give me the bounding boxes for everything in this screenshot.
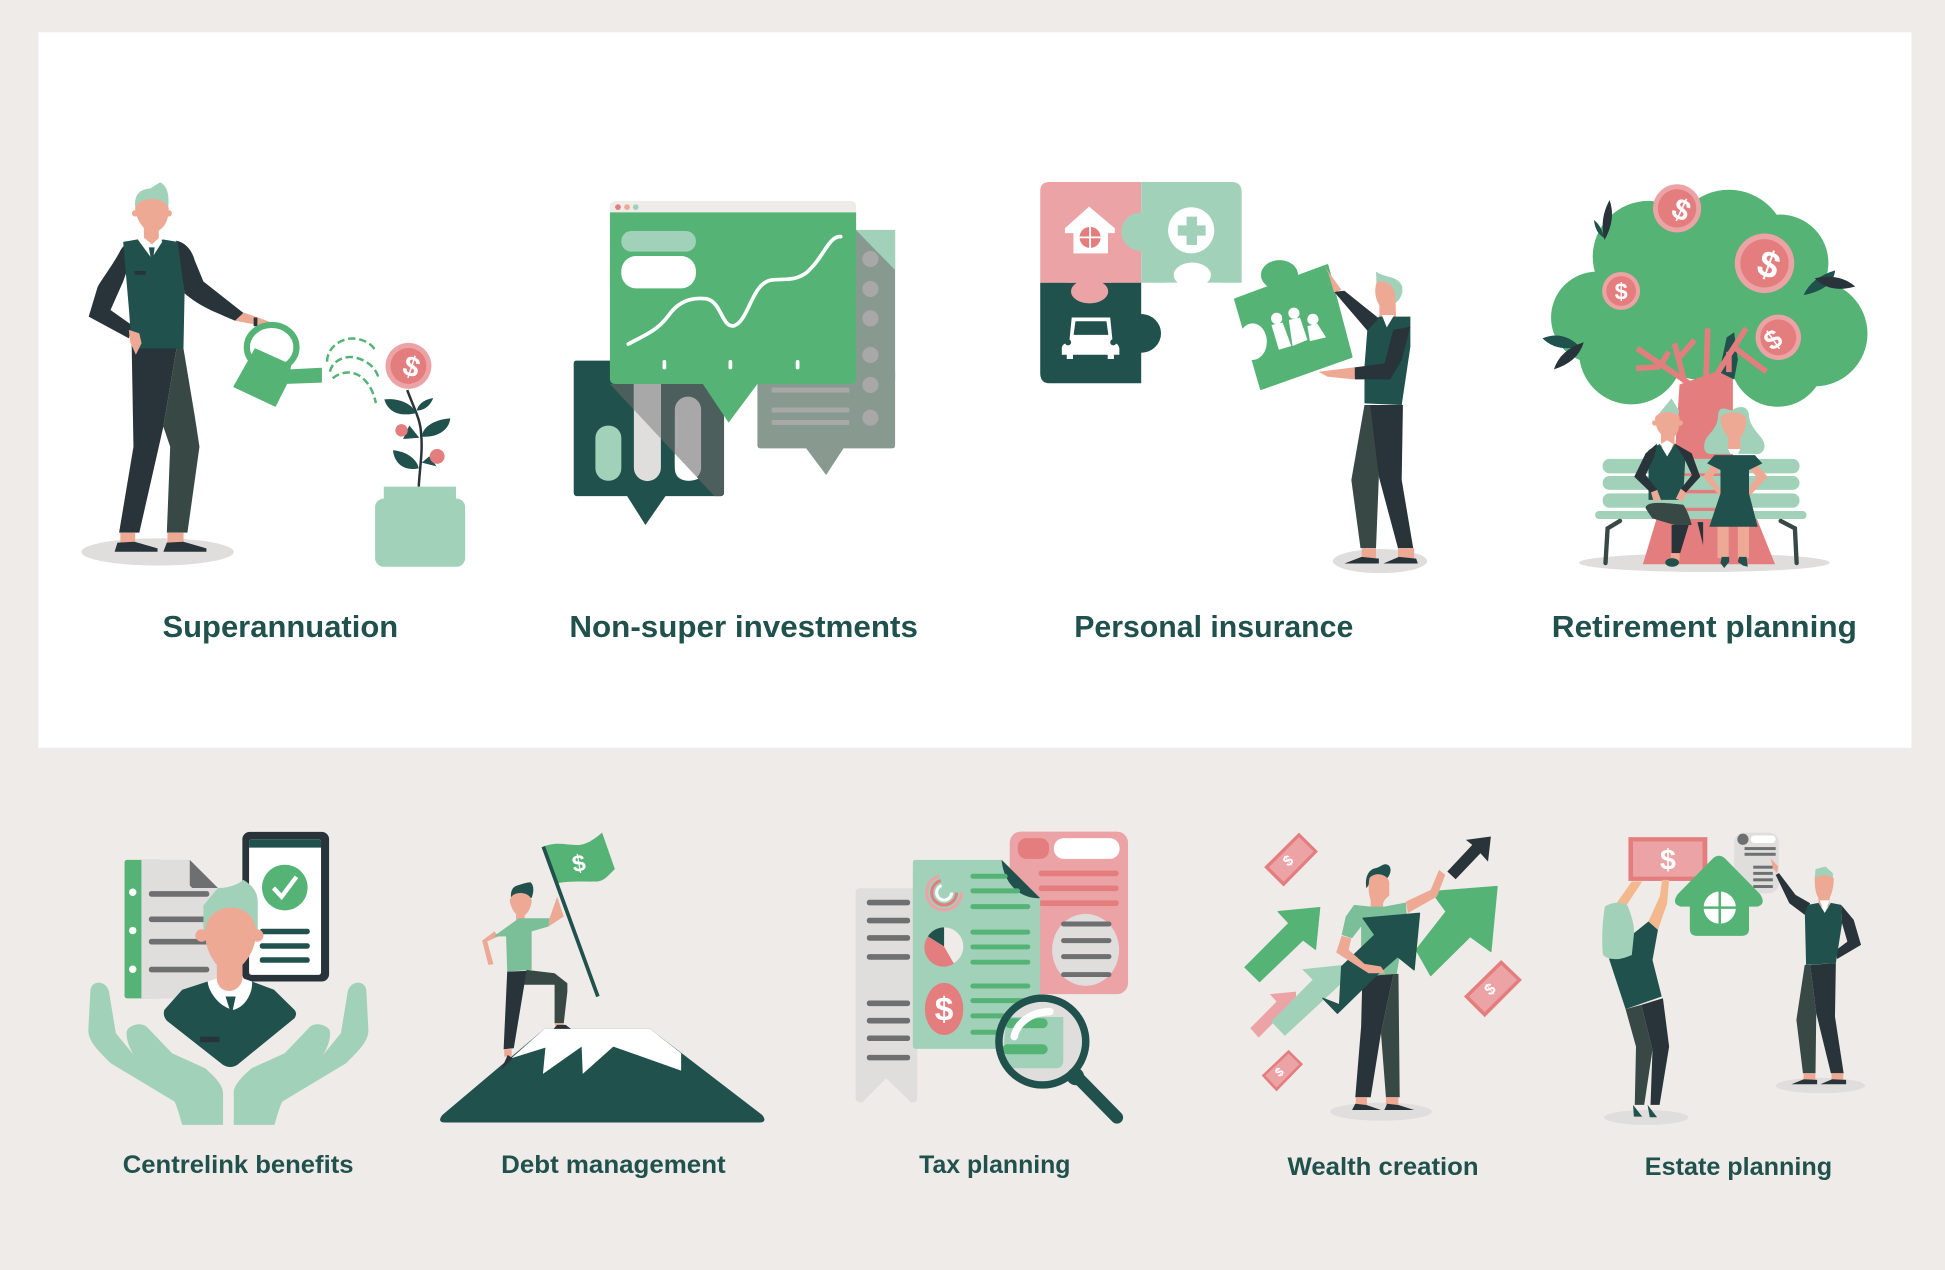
money tree [1542, 184, 1867, 564]
man holding puzzle piece [1319, 266, 1418, 563]
man reaching up [1771, 858, 1861, 1084]
pink document [1010, 832, 1128, 994]
advisor bust [164, 880, 296, 1067]
panel: wealth creation [1245, 833, 1522, 1121]
browser line chart panel [610, 201, 856, 423]
bar chart speech panel [574, 361, 724, 525]
panel: tax planning [856, 832, 1128, 1117]
document [125, 860, 218, 998]
money bills [1262, 833, 1522, 1091]
label: Non-super investments: Non-super investments [569, 610, 918, 644]
panel: personal insurance [1040, 182, 1427, 573]
coins on tree: $ [1667, 192, 1696, 229]
house icon [1675, 856, 1763, 936]
label: Superannuation: Superannuation [162, 610, 398, 644]
shadow [1333, 549, 1427, 573]
coins on tree [1602, 184, 1801, 360]
pie chart [924, 927, 963, 967]
seated woman [1703, 407, 1767, 568]
flower plant with coin: $ [399, 350, 424, 385]
ground shadow [1579, 553, 1830, 572]
held puzzle piece [1235, 260, 1351, 389]
puzzle pieces [1040, 182, 1242, 383]
ground shadow [81, 538, 234, 566]
dollar bill [1628, 837, 1707, 881]
woman reaching up [1602, 880, 1669, 1117]
growth arrows [1245, 837, 1497, 1038]
plant pot [375, 487, 465, 567]
cupped hands [88, 983, 368, 1125]
panel: non-super investments [574, 201, 895, 525]
panel: estate planning [1602, 833, 1865, 1125]
label: Wealth creation: Wealth creation [1288, 1153, 1479, 1181]
white top panel [38, 32, 1912, 748]
ground shadow [1330, 1103, 1432, 1121]
document held up [1734, 833, 1779, 893]
man watering [89, 182, 270, 552]
water arcs [327, 338, 378, 403]
tree leaves [1542, 200, 1855, 369]
ground shadows [1604, 1078, 1865, 1125]
park bench [1595, 459, 1806, 563]
dollar badge [925, 983, 963, 1035]
label: Tax planning: Tax planning [919, 1151, 1070, 1179]
flag [543, 833, 615, 997]
gray receipt [856, 888, 917, 1103]
coins on tree: $ [1752, 241, 1786, 288]
label: Personal insurance: Personal insurance [1074, 610, 1353, 644]
coins on tree: $ [1758, 322, 1788, 357]
watering can [234, 325, 321, 406]
man carrying arrow [1323, 864, 1445, 1110]
panel: debt management [440, 833, 764, 1123]
green document [913, 860, 1040, 1049]
flower plant with coin [384, 343, 450, 487]
panel: retirement planning [1542, 184, 1867, 572]
money bills: $ [1272, 1065, 1287, 1080]
label: Estate planning: Estate planning [1645, 1153, 1832, 1181]
flag: $ [570, 849, 587, 877]
magnifying glass [999, 998, 1117, 1117]
label: Centrelink benefits: Centrelink benefits [123, 1151, 354, 1179]
label: Debt management: Debt management [501, 1151, 726, 1179]
dollar bill: $ [1660, 844, 1676, 876]
dollar badge: $ [935, 992, 954, 1029]
seated man [1634, 398, 1703, 567]
mountain [440, 1029, 764, 1123]
money bills: $ [1280, 852, 1298, 870]
money bills: $ [1481, 980, 1500, 999]
panel: centrelink benefits [88, 832, 368, 1125]
phone with check [242, 832, 329, 982]
panel: superannuation [81, 182, 465, 567]
back speech panel [757, 230, 895, 475]
ring chart [927, 875, 961, 910]
label: Retirement planning: Retirement planning [1552, 610, 1857, 644]
coins on tree: $ [1615, 279, 1628, 305]
climber [482, 882, 571, 1070]
